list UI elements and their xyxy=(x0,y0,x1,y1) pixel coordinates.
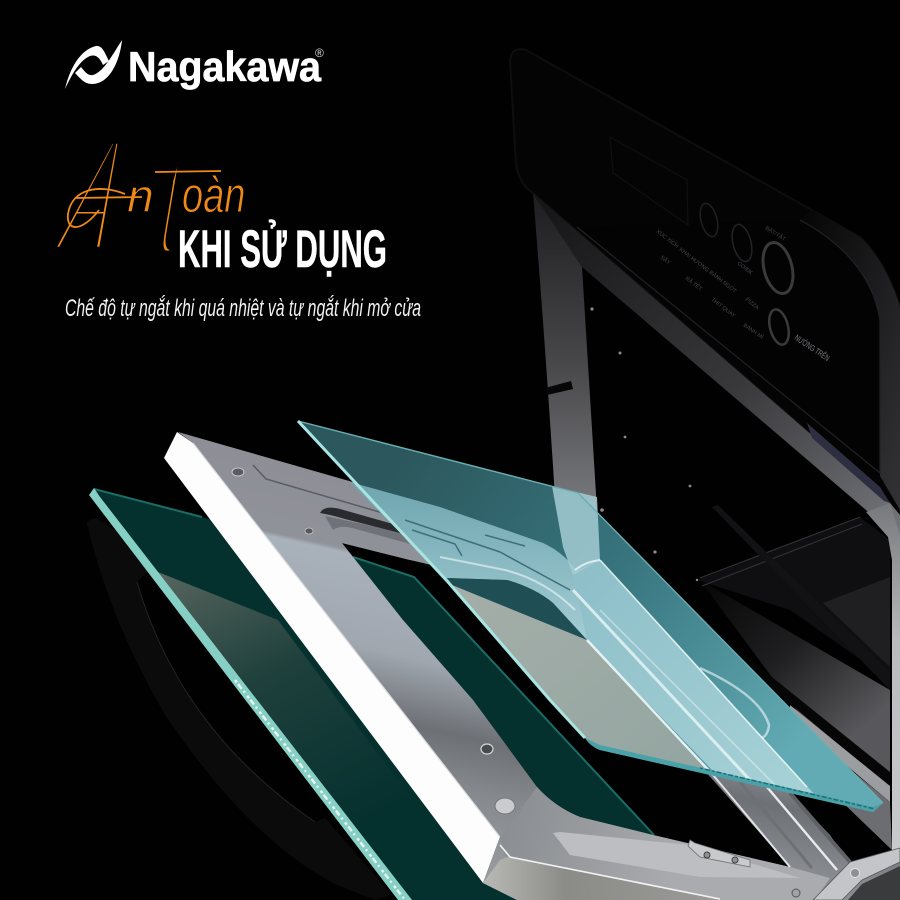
script heading: t xyxy=(155,123,186,285)
front glass pane xyxy=(298,421,883,812)
window slot shade xyxy=(325,516,410,544)
glass rail highlights xyxy=(440,557,807,787)
door handle xyxy=(87,518,392,900)
side rail through glass xyxy=(573,560,815,795)
frame screws xyxy=(232,468,515,814)
door pin xyxy=(545,381,573,395)
back glass speckled edge xyxy=(235,680,405,900)
panel labels: RÃ TẾT xyxy=(684,275,704,293)
window slot xyxy=(320,508,400,533)
oven body xyxy=(510,49,900,850)
panel labels: BÁNH MÌ xyxy=(742,322,765,341)
interior shelf lines xyxy=(700,517,862,586)
frame metal sheet xyxy=(178,432,900,900)
back glass body xyxy=(92,489,660,900)
oven wall side panel xyxy=(823,577,890,667)
glass speckled edge xyxy=(700,768,875,809)
panel labels: KHAI HƯƠNG xyxy=(678,247,710,274)
display window xyxy=(610,137,688,225)
oven control panel xyxy=(510,49,900,520)
panel labels: THỊT QUAY xyxy=(710,297,736,320)
floor dark strip xyxy=(715,640,890,788)
hinge plate xyxy=(792,848,900,900)
floor silver rim xyxy=(790,705,890,802)
panel labels xyxy=(655,224,832,363)
panel labels: BÁNH NGỌT xyxy=(708,269,738,295)
glass sheet xyxy=(298,421,883,812)
oven right column xyxy=(866,503,900,850)
back glass lit edge xyxy=(89,488,412,900)
frame white side edge xyxy=(164,432,500,883)
panel labels: BẬT/TẮT xyxy=(764,224,788,243)
side rail strips below glass xyxy=(713,775,850,870)
logo mark xyxy=(65,40,122,89)
frame stamped line xyxy=(253,465,400,518)
slot inner tab xyxy=(333,527,410,560)
steel door frame xyxy=(164,432,900,900)
back glass pane xyxy=(89,488,660,900)
logo wordmark: Nagakawa xyxy=(128,43,322,90)
oven left column xyxy=(533,193,600,575)
glass bracket details xyxy=(405,520,570,590)
panel labels: XÚC XÍCH xyxy=(655,228,680,250)
back glass top edge xyxy=(94,489,654,835)
oven back wall xyxy=(697,517,890,680)
interior screws xyxy=(590,307,698,581)
lip highlight xyxy=(500,845,720,899)
script heading: oàn xyxy=(182,167,245,223)
oven column through glass xyxy=(552,486,600,575)
frame bottom lip xyxy=(483,857,720,900)
bracket screws xyxy=(704,852,738,863)
oven rack bar xyxy=(712,505,890,690)
main heading: KHI SỬ DỤNG xyxy=(178,219,387,279)
panel labels: NƯỚNG TRÊN xyxy=(793,332,832,363)
panel labels: CƠ/ĐK xyxy=(736,261,754,277)
script heading xyxy=(40,110,380,280)
grey reflection through glass xyxy=(452,585,713,775)
glass lit edges xyxy=(298,421,883,803)
dark tint through glass xyxy=(448,578,587,640)
script flourish xyxy=(68,171,221,227)
panel accent strip xyxy=(807,423,890,503)
registered mark: ® xyxy=(315,46,324,60)
panel labels: PIZZA xyxy=(744,297,760,311)
frame raised ridge xyxy=(553,832,800,878)
bottom rail xyxy=(500,787,830,900)
logo xyxy=(65,40,324,90)
oven diagonal frame band xyxy=(533,193,900,545)
lower oven wall xyxy=(780,712,892,850)
panel labels: SẤY xyxy=(659,254,672,267)
panel dials xyxy=(697,202,798,347)
hinge bracket on rail xyxy=(688,840,750,867)
frame upper band through glass xyxy=(350,482,587,640)
script heading: A xyxy=(46,103,145,287)
subtitle: Chế độ tự ngắt khi quá nhiệt và tự ngắt khi mở cửa xyxy=(65,295,421,322)
back glass reflection xyxy=(153,570,450,850)
oven floor xyxy=(700,580,890,790)
script heading: n xyxy=(127,170,154,222)
frame thin bevel xyxy=(193,443,500,837)
